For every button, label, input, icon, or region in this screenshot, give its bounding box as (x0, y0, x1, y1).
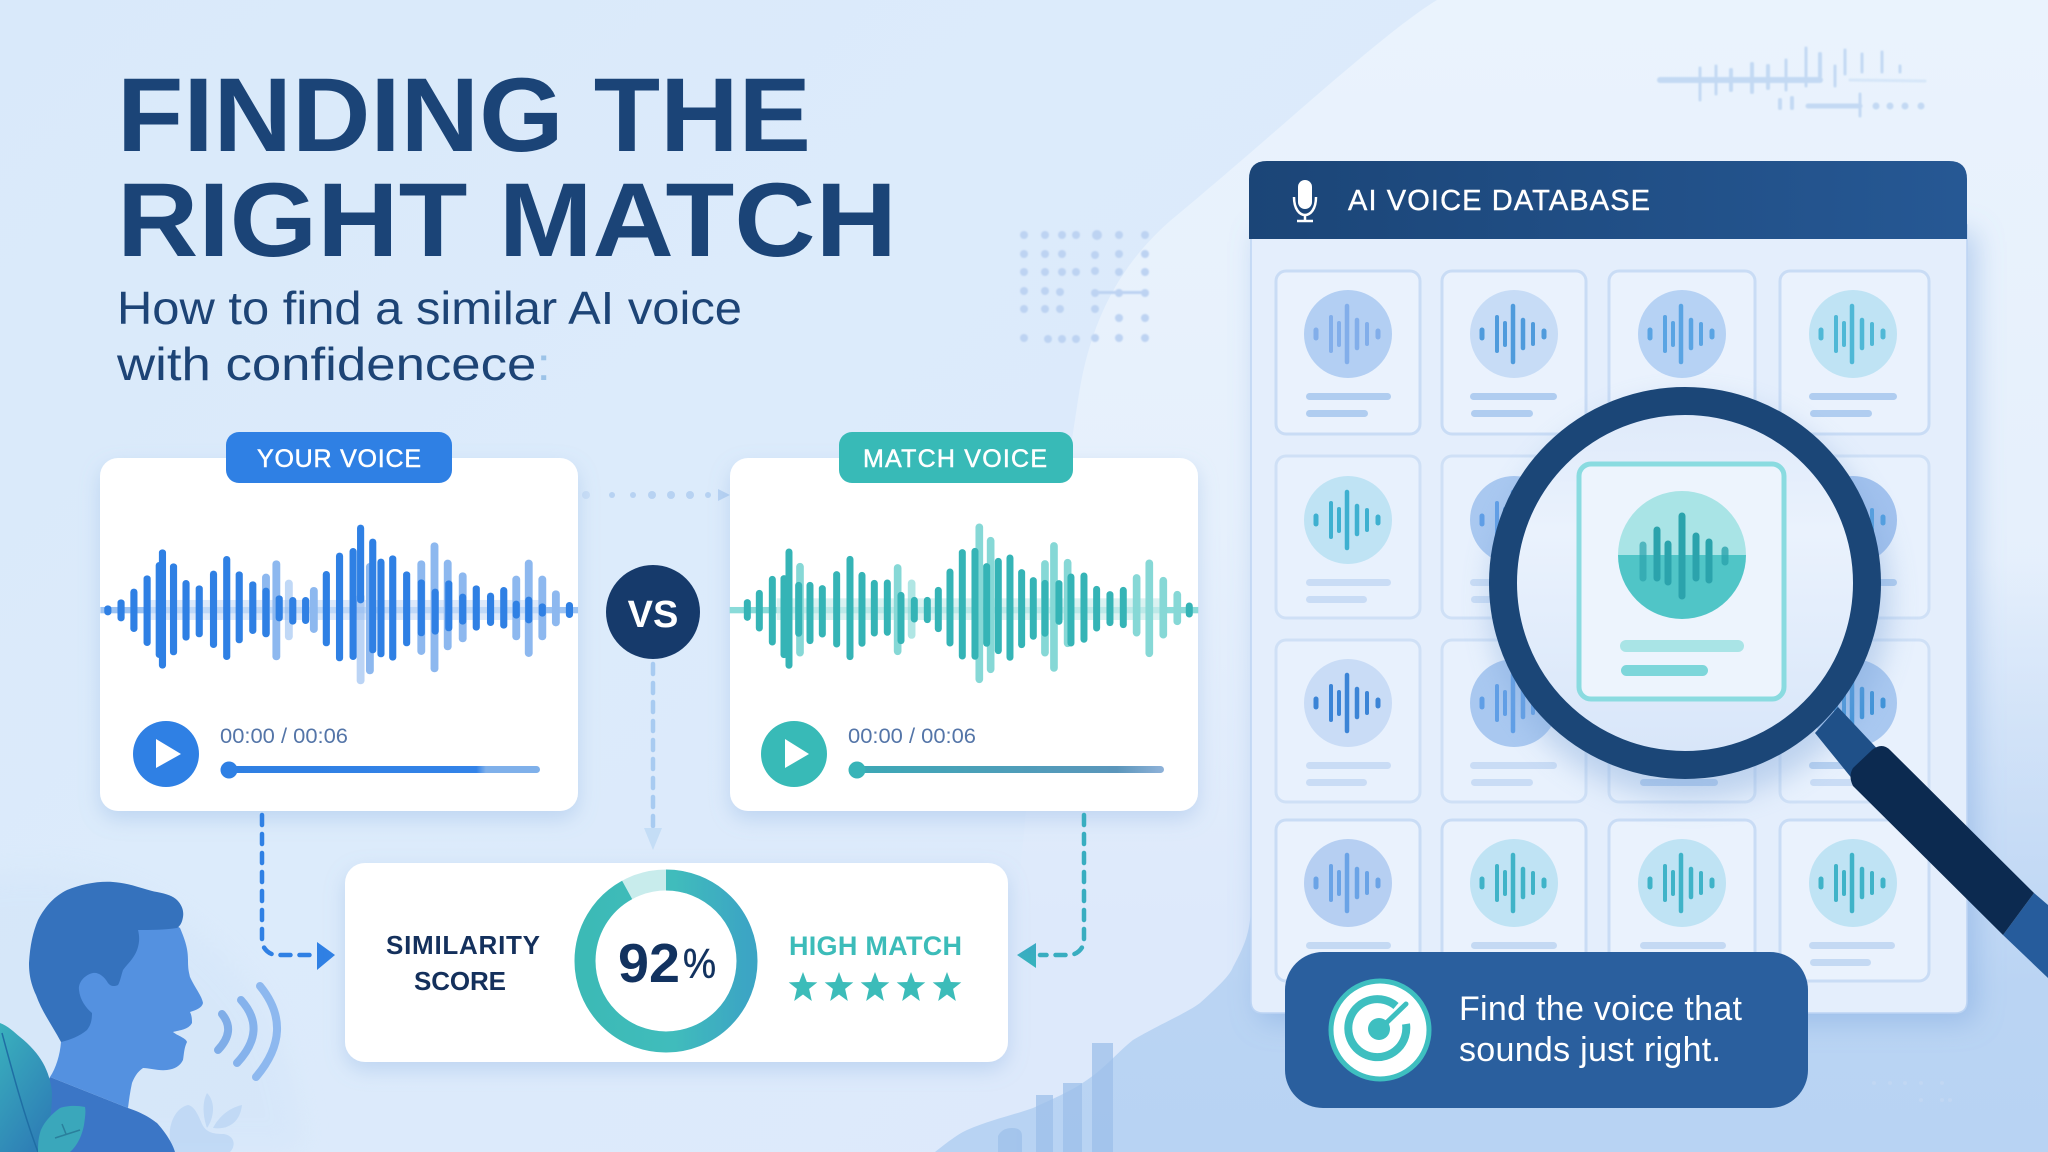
donut gauge (585, 880, 747, 1042)
progress bar: your voice (220, 762, 540, 778)
database body (1251, 225, 1967, 1013)
magnifier lens (1515, 413, 1855, 753)
score value: % (683, 940, 716, 987)
play button: your voice (133, 721, 199, 787)
title: FINDING THE (117, 57, 811, 174)
row 3 (1276, 640, 1929, 802)
badge: match voice: MATCH VOICE (863, 445, 1047, 473)
high match label: HIGH MATCH (789, 931, 962, 961)
voice card grid (1276, 271, 1929, 981)
magnifier ring (1503, 401, 1867, 765)
progress bar: match voice (848, 762, 1164, 778)
title: RIGHT MATCH (117, 162, 897, 279)
subtitle: with confidencece : (116, 338, 551, 390)
score value (618, 932, 716, 994)
vs badge: VS (628, 594, 678, 636)
subtitle (116, 282, 742, 390)
magnifier (1490, 400, 2048, 978)
waveform: your voice (100, 528, 578, 681)
callout (1285, 952, 1808, 1108)
row 2 (1276, 456, 1929, 618)
highlighted voice card (1579, 464, 1784, 699)
row 1 (1276, 271, 1929, 434)
score value: 92 (618, 932, 680, 994)
badge: match voice (839, 432, 1073, 483)
decorative faint bars bottom (998, 1043, 1113, 1152)
arrow: your voice to score (262, 815, 335, 970)
vs dashed arrow (644, 664, 662, 850)
panel: match voice (730, 432, 1198, 811)
similarity label (386, 930, 540, 996)
icon: leaves (0, 1023, 85, 1152)
body (20, 1077, 175, 1152)
hair (29, 882, 183, 1042)
dotted connector between cards (582, 489, 730, 501)
magnifier handle (1815, 707, 2048, 978)
star rating (789, 972, 961, 1001)
decorative dot grid (1020, 230, 1149, 343)
play button: match voice (761, 721, 827, 787)
decorative faint dots bottom right (1872, 1081, 1952, 1102)
waveform: match voice (730, 527, 1198, 679)
panel: ai voice database (1249, 161, 1967, 1013)
title (117, 57, 897, 279)
time label: your voice: 00:00 / 00:06 (220, 725, 348, 748)
icon: sound waves (218, 986, 277, 1077)
icon: microphone (1294, 180, 1316, 221)
subtitle: How to find a similar AI voice (117, 282, 742, 334)
arrow: match voice to score (1017, 815, 1084, 968)
decorative top-right waveform (1660, 48, 1925, 116)
vs badge (606, 565, 700, 659)
time label: match voice: 00:00 / 00:06 (848, 725, 976, 748)
callout text (1459, 990, 1743, 1069)
icon: speaking person (20, 882, 203, 1152)
similarity label: SCORE (414, 966, 506, 996)
row 4 (1276, 820, 1929, 981)
callout text: sounds just right. (1459, 1031, 1721, 1069)
faint plant (165, 1093, 242, 1152)
database header (1249, 161, 1967, 239)
panel: your voice (100, 432, 578, 811)
face and neck (50, 926, 203, 1108)
panel: similarity score (345, 863, 1008, 1062)
callout text: Find the voice that (1459, 990, 1743, 1028)
icon: target (1331, 981, 1429, 1079)
badge: your voice: YOUR VOICE (257, 445, 421, 473)
database heading: AI VOICE DATABASE (1348, 185, 1650, 217)
similarity label: SIMILARITY (386, 930, 540, 960)
badge: your voice (226, 432, 452, 483)
